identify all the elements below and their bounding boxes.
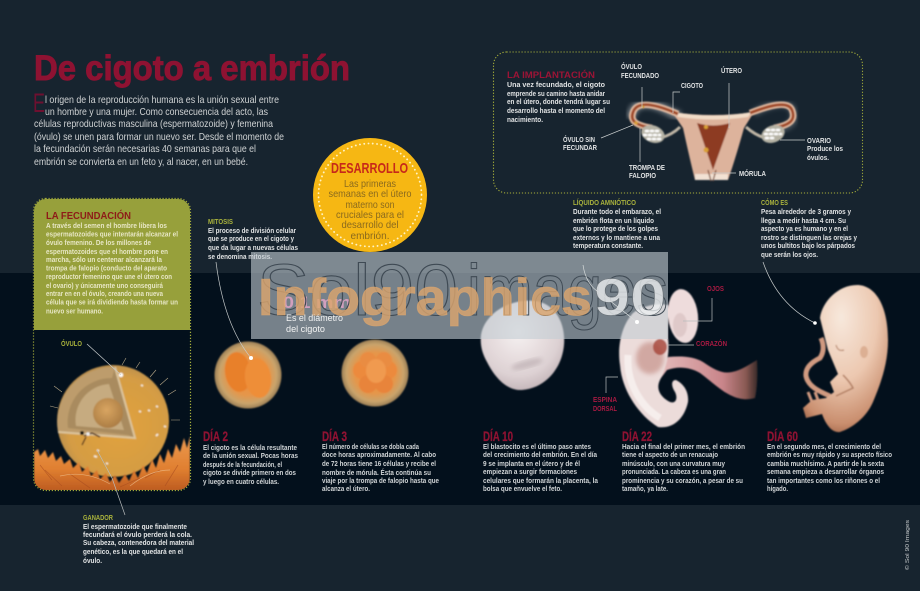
embryo labels: DORSAL bbox=[593, 404, 617, 413]
callout: ganador: GANADOR bbox=[83, 513, 114, 522]
callout: desarrollo circle bbox=[313, 138, 427, 252]
dot marker bbox=[635, 320, 639, 324]
text: día 3: El número de células se dobla cada bbox=[322, 442, 420, 451]
callout: ganador: El espermatozoide que finalmente bbox=[83, 522, 187, 531]
óvulo leader line bbox=[87, 344, 121, 375]
fur bbox=[34, 436, 190, 491]
implantación text: desarrollo hasta el momento del bbox=[507, 106, 605, 115]
text: día 10: 9 se implanta en el útero y de él bbox=[483, 459, 580, 468]
panel: la implantación bbox=[494, 52, 862, 193]
fecundación text: el ovario) y únicamente uno conseguirá bbox=[46, 281, 164, 290]
label: trompa de falopio: TROMPA DE bbox=[629, 163, 665, 172]
desarrollo text: materno son bbox=[346, 199, 395, 211]
label: cigoto: CIGOTO bbox=[681, 81, 703, 90]
text: día 3: nombre de mórula. Ésta continúa su bbox=[322, 468, 431, 477]
fecundación text: óvulo femenino. De los millones de bbox=[46, 238, 151, 247]
intro text block: (óvulo) se unen para formar un nuevo ser. Desde el momento de bbox=[34, 132, 284, 143]
fecundación text: espermatozoides que intentarán alcanzar el bbox=[46, 230, 178, 238]
implantación heading: LA IMPLANTACIÓN bbox=[507, 69, 595, 81]
implantación text: emprende su camino hasta anidar bbox=[507, 89, 605, 98]
text: líquido amniótico: embrión flota en un líquido bbox=[573, 216, 654, 225]
intro text block: l origen de la reproducción humana es la unión sexual entre bbox=[45, 95, 279, 106]
fecundación heading: LA FECUNDACIÓN bbox=[46, 209, 131, 222]
label: ovario: óvulos. bbox=[807, 153, 829, 162]
text: día 3 bbox=[322, 428, 439, 493]
text: líquido amniótico bbox=[573, 198, 661, 250]
implantación leader lines bbox=[601, 83, 805, 173]
callout: ganador: óvulo. bbox=[83, 556, 102, 565]
icon: day 3 morula bbox=[342, 340, 408, 406]
text: día 22: pronunciada. La cabeza es una gran bbox=[622, 467, 726, 476]
blastocyst shadow bbox=[511, 356, 543, 372]
text: día 60: cambia muchísimo. A partir de la sexta bbox=[767, 459, 885, 468]
amniotic leader line bbox=[583, 265, 637, 322]
implantación text: nacimiento. bbox=[507, 115, 543, 124]
watermark: Sol90 bbox=[257, 251, 458, 331]
label: óvulo fecundado: FECUNDADO bbox=[621, 71, 659, 80]
ganador leader line bbox=[97, 450, 125, 515]
text: día 22: Hacia el final del primer mes, el embrión bbox=[622, 442, 745, 451]
embryo labels bbox=[593, 284, 727, 413]
text: cómo es: CÓMO ES bbox=[761, 198, 788, 207]
uterus illustration bbox=[631, 104, 794, 181]
fecundación text: espermatozoides que el hombre pone en bbox=[46, 247, 168, 256]
icon: day 10 blastocyst bbox=[481, 301, 564, 390]
text: día 10: DÍA 10 bbox=[483, 428, 513, 444]
desarrollo heading: DESARROLLO bbox=[331, 160, 408, 177]
text: día 22 bbox=[622, 428, 745, 493]
text: cómo es bbox=[761, 198, 858, 259]
text: día 22: DÍA 22 bbox=[622, 428, 652, 444]
zygote size caption: Es el diámetro bbox=[286, 313, 343, 324]
text: líquido amniótico: Durante todo el embarazo, el bbox=[573, 207, 661, 216]
desarrollo text: embrión. bbox=[350, 230, 390, 242]
text: día 10: del crecimiento del embrión. En el día bbox=[483, 450, 598, 459]
text: día 22: minúsculo, con una curvatura muy bbox=[622, 459, 726, 468]
text: día 22: tamaño, ya late. bbox=[622, 484, 668, 493]
fecundación text: entrar en en el óvulo, creando una nueva bbox=[46, 289, 164, 298]
label: ovario: Produce los bbox=[807, 144, 843, 153]
fecundación text: reproductor femenino que une el útero con bbox=[46, 272, 172, 281]
text: día 60: tan importantes como los riñones o el bbox=[767, 476, 880, 485]
icon: day 2 cell bbox=[214, 342, 282, 408]
desarrollo text: semanas en el útero bbox=[328, 188, 412, 200]
text: día 60: embrión es muy rápido y su aspecto físico bbox=[767, 450, 892, 459]
desarrollo text bbox=[328, 178, 412, 242]
intro text block: E bbox=[33, 88, 45, 118]
text: día 10: bolsa que envuelve el feto. bbox=[483, 484, 562, 493]
text: cómo es: rostro se distinguen las orejas y bbox=[761, 233, 858, 242]
label: ovario: OVARIO bbox=[807, 136, 831, 145]
text: cómo es: llega a medir hasta 4 cm. Su bbox=[761, 216, 846, 225]
fecundación text: trompa de falopio (conducto del aparato bbox=[46, 264, 167, 272]
text: día 10: empiezan a surgir formaciones bbox=[483, 467, 577, 476]
text: mitosis: que da lugar a nuevas células bbox=[208, 243, 298, 252]
implantación text: en el útero, donde tendrá lugar su bbox=[507, 97, 610, 106]
label: óvulo sin fecundar: ÓVULO SIN bbox=[563, 135, 595, 144]
text: líquido amniótico: LÍQUIDO AMNIÓTICO bbox=[573, 198, 636, 207]
text: día 2: DÍA 2 bbox=[203, 428, 228, 444]
zygote size caption: del cigoto bbox=[286, 324, 325, 335]
text: mitosis: se denomina mitosis. bbox=[208, 252, 272, 261]
text: cómo es: aspecto ya es humano y en el bbox=[761, 224, 848, 233]
text: líquido amniótico: que lo protege de los golpes bbox=[573, 224, 658, 233]
intro text block: un hombre y una mujer. Como consecuencia del acto, las bbox=[45, 107, 268, 118]
callout: ganador: fecundará el óvulo perderá la cola. bbox=[83, 530, 192, 539]
text: líquido amniótico: externos y lo mantiene a una bbox=[573, 233, 661, 242]
title: De cigoto a embrión bbox=[34, 49, 350, 88]
fecundación text bbox=[46, 221, 178, 316]
text: día 10: celulares que formarán la placenta, la bbox=[483, 476, 599, 485]
fecundación text: A través del semen el hombre libera los bbox=[46, 221, 167, 230]
label: óvulo fecundado: ÓVULO bbox=[621, 62, 642, 71]
text: día 3: viaje por la trompa de falopio hasta que bbox=[322, 476, 439, 485]
text: día 22: tiene el aspecto de un renacuajo bbox=[622, 450, 718, 459]
text: día 2 bbox=[203, 428, 298, 486]
embryo labels: ESPINA bbox=[593, 395, 617, 404]
implantación text: Una vez fecundado, el cigoto bbox=[507, 80, 605, 89]
text: día 60 bbox=[767, 428, 892, 493]
text: cómo es: unos bultitos bajo los párpados bbox=[761, 241, 855, 250]
panel: la fecundación bbox=[34, 198, 190, 491]
desarrollo text: Las primeras bbox=[344, 178, 396, 190]
intro text block bbox=[33, 88, 284, 168]
text: día 10 bbox=[483, 428, 599, 493]
text: día 60: hígado. bbox=[767, 484, 788, 493]
watermark: Infographics bbox=[258, 269, 592, 327]
text: día 22: prominencia y su corazón, a pesar de su bbox=[622, 476, 743, 485]
desarrollo text: desarrollo del bbox=[342, 219, 398, 231]
callout: ganador: genético, es la que quedará en el bbox=[83, 547, 183, 556]
implantación text bbox=[507, 80, 610, 124]
fetus leader line bbox=[763, 262, 815, 323]
dot marker bbox=[813, 321, 817, 325]
text: día 60: DÍA 60 bbox=[767, 428, 798, 444]
embryo labels: OJOS bbox=[707, 284, 724, 293]
fecundación text: marcha, sólo un centenar alcanzará la bbox=[46, 255, 163, 264]
copyright: © Sol 90 Images bbox=[904, 520, 911, 570]
text: mitosis: que se produce en el cigoto y bbox=[208, 234, 295, 243]
text: día 2: cigoto se divide primero en dos bbox=[203, 468, 296, 477]
text: día 2: y luego en cuatro células. bbox=[203, 477, 279, 486]
text: día 2: después de la fecundación, el bbox=[203, 460, 282, 469]
label: trompa de falopio bbox=[629, 163, 665, 180]
text: cómo es: Pesa alrededor de 3 gramos y bbox=[761, 207, 852, 216]
desarrollo text: cruciales para el bbox=[336, 209, 404, 221]
text: día 3: de 72 horas tiene 16 células y recibe el bbox=[322, 459, 436, 468]
fecundación text: nuevo ser humano. bbox=[46, 306, 103, 316]
fecundación text: célula que se irá dividiendo hasta formar un bbox=[46, 298, 178, 306]
label: óvulo sin fecundar: FECUNDAR bbox=[563, 143, 598, 152]
label: óvulo fecundado bbox=[621, 62, 659, 80]
text: líquido amniótico: temperatura constante. bbox=[573, 241, 643, 250]
mitosis leader line bbox=[216, 262, 251, 358]
intro text block: células reproductivas masculina (espermatozoide) y femenina bbox=[34, 119, 273, 130]
text: día 60: semana empieza a desarrollar órganos bbox=[767, 467, 884, 476]
text: mitosis bbox=[208, 217, 298, 261]
label: útero: ÚTERO bbox=[721, 66, 742, 75]
label: mórula: MÓRULA bbox=[739, 169, 767, 178]
text: día 10: El blastocito es el último paso antes bbox=[483, 442, 591, 451]
egg illustration bbox=[34, 358, 190, 491]
dot marker bbox=[249, 356, 253, 360]
text: día 3: doce horas aproximadamente. Al cabo bbox=[322, 450, 436, 459]
intro text block: la fecundación serán necesarias 40 semanas para que el bbox=[34, 144, 256, 155]
icon: day 22 embryo bbox=[619, 288, 757, 427]
embryo labels: CORAZÓN bbox=[696, 339, 727, 348]
watermark: images bbox=[467, 251, 668, 331]
label: trompa de falopio: FALOPIO bbox=[629, 171, 656, 180]
watermark: 90 bbox=[594, 269, 666, 327]
text: día 2: de la unión sexual. Pocas horas bbox=[203, 451, 298, 460]
zygote size note: 0,1 mm bbox=[283, 293, 351, 312]
text: día 3: DÍA 3 bbox=[322, 428, 347, 444]
text: día 3: alcanza el útero. bbox=[322, 484, 370, 493]
zygote size caption bbox=[286, 313, 343, 335]
label: óvulo sin fecundar bbox=[563, 135, 598, 152]
text: día 2: El cigoto es la célula resultante bbox=[203, 443, 297, 452]
callout: ganador: Su cabeza, contenedora del material bbox=[83, 538, 194, 547]
callout: ganador bbox=[83, 513, 194, 565]
text: mitosis: MITOSIS bbox=[208, 217, 233, 226]
watermark bbox=[251, 251, 668, 339]
label: óvulo: ÓVULO bbox=[61, 339, 82, 348]
intro text block: embrión se convierta en un feto y, al nacer, en un bebé. bbox=[34, 157, 248, 168]
label: ovario bbox=[807, 136, 843, 162]
icon: day 60 fetus bbox=[803, 285, 888, 432]
text: mitosis: El proceso de división celular bbox=[208, 226, 296, 235]
text: día 60: En el segundo mes, el crecimiento del bbox=[767, 442, 881, 451]
text: cómo es: que serán los ojos. bbox=[761, 250, 818, 259]
